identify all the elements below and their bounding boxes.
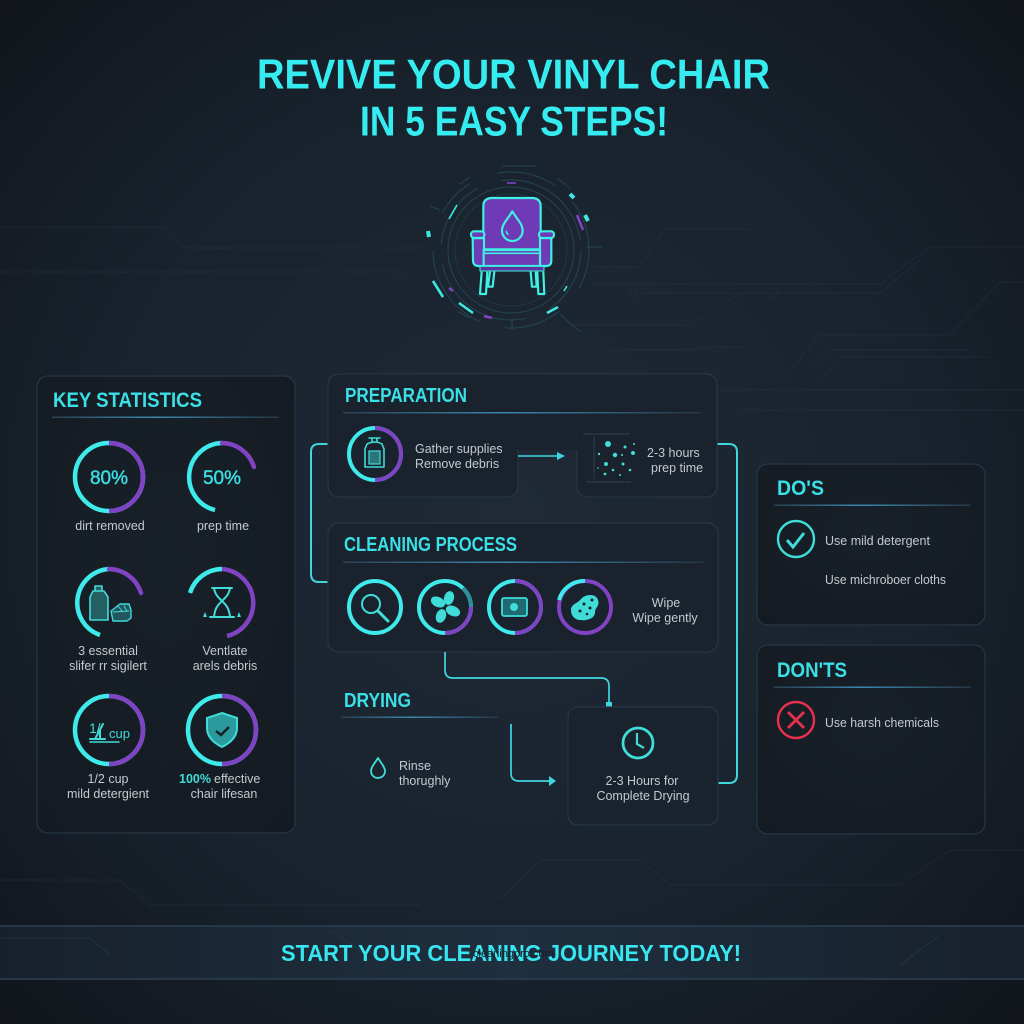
stat: 3 essential supplies: slifer rr sigilert	[69, 659, 147, 673]
text: drying duration: Complete Drying	[596, 789, 690, 803]
connector node	[606, 702, 612, 708]
panel: key statistics	[37, 376, 295, 833]
stat: 100% effective chair lifespan: effective	[214, 772, 260, 786]
title: REVIVE YOUR VINYL CHAIR	[257, 50, 770, 98]
panel: don'ts	[757, 645, 985, 834]
icon: check mark	[778, 521, 814, 557]
icon: measuring cup: 1/	[89, 720, 101, 736]
text: prep time	[647, 446, 703, 475]
text: do's list: Use mild detergent	[825, 534, 930, 548]
text: gather supplies: Remove debris	[415, 457, 499, 471]
ring icon: dirty surface	[489, 581, 541, 633]
stat: 3 essential supplies	[69, 569, 147, 673]
icon: measuring cup: cup	[109, 726, 130, 741]
text: do's list: Use michroboer cloths	[825, 573, 946, 587]
icon: detergent bottle and sponge	[90, 586, 131, 621]
icon: hourglass	[203, 588, 241, 617]
stat: 100% effective chair lifespan: chair lifesan	[191, 787, 257, 801]
stat: 100% effective chair lifespan: 100%	[179, 772, 211, 786]
text: rinse thoroughly	[399, 759, 451, 788]
text: rinse thoroughly: thorughly	[399, 774, 451, 788]
icon: clock	[623, 728, 653, 758]
stat: 50% prep time: prep time	[197, 519, 249, 533]
stat: 80% dirt removed: dirt removed	[75, 519, 145, 533]
stat: 100% effective chair lifespan	[179, 696, 260, 801]
panel: cleaning process	[328, 523, 718, 652]
heading: do's: DO'S	[777, 477, 824, 500]
section: drying	[341, 690, 498, 788]
ring icon: magnifier	[349, 581, 401, 633]
stat: 50% prep time	[189, 443, 254, 533]
panel: preparation	[328, 374, 717, 497]
text: wipe gently: Wipe	[652, 596, 680, 610]
ring icon: soap bottle	[349, 428, 401, 480]
text: rinse thoroughly: Rinse	[399, 759, 431, 773]
call to action: START YOUR CLEANING JOURNEY TODAY!	[281, 940, 741, 966]
panel: drying time	[568, 707, 718, 825]
ring icon: sponge	[559, 581, 611, 633]
text: drying duration: 2-3 Hours for	[606, 774, 678, 788]
connector: cleaning to drying box	[445, 652, 609, 703]
text: drying duration	[596, 774, 690, 803]
connector: preparation to cleaning	[311, 444, 328, 582]
heading: drying: DRYING	[344, 690, 411, 712]
stat: 1/2 cup mild detergent: mild detergient	[67, 787, 150, 801]
panel: do's	[757, 464, 985, 625]
stat: 80% dirt removed: 80%	[90, 468, 128, 489]
website text: cleaningpro.com	[473, 948, 554, 960]
arrow: drying to box	[511, 724, 556, 786]
text: prep time: prep time	[651, 461, 703, 475]
text: don'ts list: Use harsh chemicals	[825, 716, 939, 730]
text: wipe gently	[632, 596, 698, 625]
text: prep time: 2-3 hours	[647, 446, 700, 460]
text: gather supplies	[415, 442, 503, 471]
text: do's list	[825, 534, 946, 587]
connector: preparation to drying box	[717, 444, 737, 783]
text: gather supplies: Gather supplies	[415, 442, 503, 456]
icon: water drop	[371, 758, 385, 778]
heading: key statistics: KEY STATISTICS	[53, 389, 202, 412]
stat: 1/2 cup mild detergent: 1/2 cup	[87, 772, 129, 786]
stat: ventilate hourglass: Ventlate	[202, 644, 248, 658]
heading: don'ts: DON'TS	[777, 659, 847, 682]
icon: shield with check	[207, 713, 237, 747]
stat: 1/2 cup mild detergent	[67, 696, 150, 801]
icon: cross	[778, 702, 814, 738]
footer banner	[0, 926, 1024, 979]
text: wipe gently: Wipe gently	[632, 611, 698, 625]
heading: cleaning process: CLEANING PROCESS	[344, 534, 517, 556]
title	[257, 50, 770, 144]
title: IN 5 EASY STEPS!	[360, 98, 668, 144]
icon: debris particles	[583, 434, 635, 482]
stat: 3 essential supplies: 3 essential	[78, 644, 138, 658]
ring icon: fan	[419, 581, 471, 633]
stat: 50% prep time: 50%	[203, 468, 241, 489]
stat: ventilate hourglass: arels debris	[193, 659, 257, 673]
stat: ventilate hourglass	[190, 569, 257, 673]
icon: measuring cup	[89, 720, 130, 742]
heading: preparation: PREPARATION	[345, 385, 467, 407]
arrow: preparation step	[518, 452, 565, 460]
stat: 80% dirt removed	[75, 443, 145, 533]
hero icon: vinyl chair with droplet and tech rings	[428, 166, 602, 332]
